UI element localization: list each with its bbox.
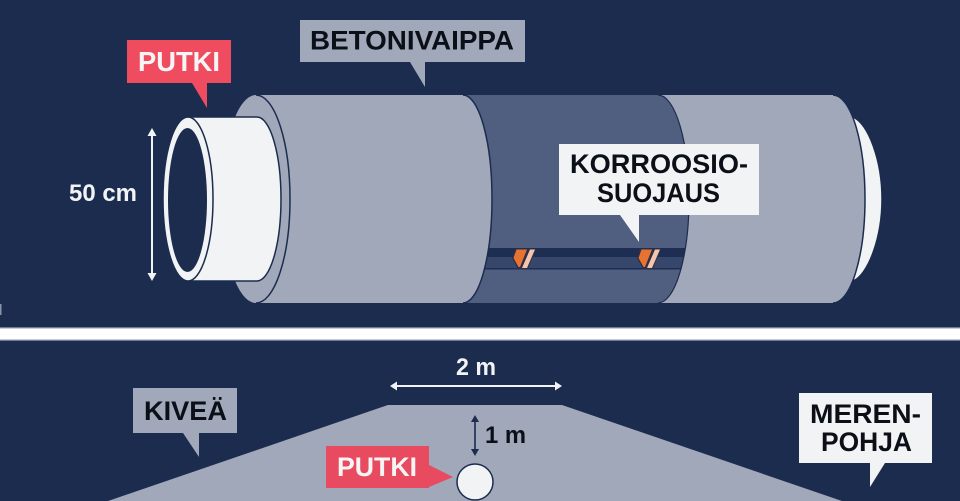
panel: pipe cross-section illustration xyxy=(163,95,882,303)
arrow: 50 cm diameter xyxy=(148,128,156,281)
callout: PUTKI top xyxy=(127,40,231,108)
callout: KORROOSIOSUOJAUS: SUOJAUS xyxy=(597,178,720,208)
callout: PUTKI top: PUTKI xyxy=(138,46,220,77)
callout: BETONIVAIPPA xyxy=(300,20,525,87)
rock mound xyxy=(108,405,842,501)
corrosion protection section xyxy=(463,95,689,303)
corrosion clip left xyxy=(512,248,536,269)
pipe circle xyxy=(457,464,493,500)
label: 50 cm: 50 cm xyxy=(69,180,137,207)
callout: KORROOSIOSUOJAUS xyxy=(559,144,759,242)
pipe front end xyxy=(163,117,281,281)
callout: KORROOSIOSUOJAUS: KORROOSIO- xyxy=(570,149,748,179)
callout: MERENPOHJA: MEREN- xyxy=(810,399,921,429)
callout: MERENPOHJA xyxy=(799,393,932,487)
divider xyxy=(0,328,960,340)
callout: PUTKI bottom: PUTKI xyxy=(337,452,417,482)
arrow: 2 m width xyxy=(390,382,562,390)
pipe far end xyxy=(853,117,882,281)
concrete jacket left section xyxy=(222,95,492,303)
arrow: 1 m depth xyxy=(471,415,479,456)
concrete jacket right section xyxy=(640,95,865,303)
callout: MERENPOHJA: POHJA xyxy=(821,427,912,457)
label: 1 m: 1 m xyxy=(485,422,526,449)
callout: BETONIVAIPPA: BETONIVAIPPA xyxy=(310,26,514,56)
corrosion clip right xyxy=(637,248,661,269)
panel: seabed cross-section xyxy=(108,405,842,501)
callout: KIVEÄ: KIVEÄ xyxy=(144,396,227,426)
label: 2 m: 2 m xyxy=(456,354,496,381)
callout: PUTKI bottom xyxy=(326,446,453,488)
callout: KIVEÄ xyxy=(133,388,237,457)
